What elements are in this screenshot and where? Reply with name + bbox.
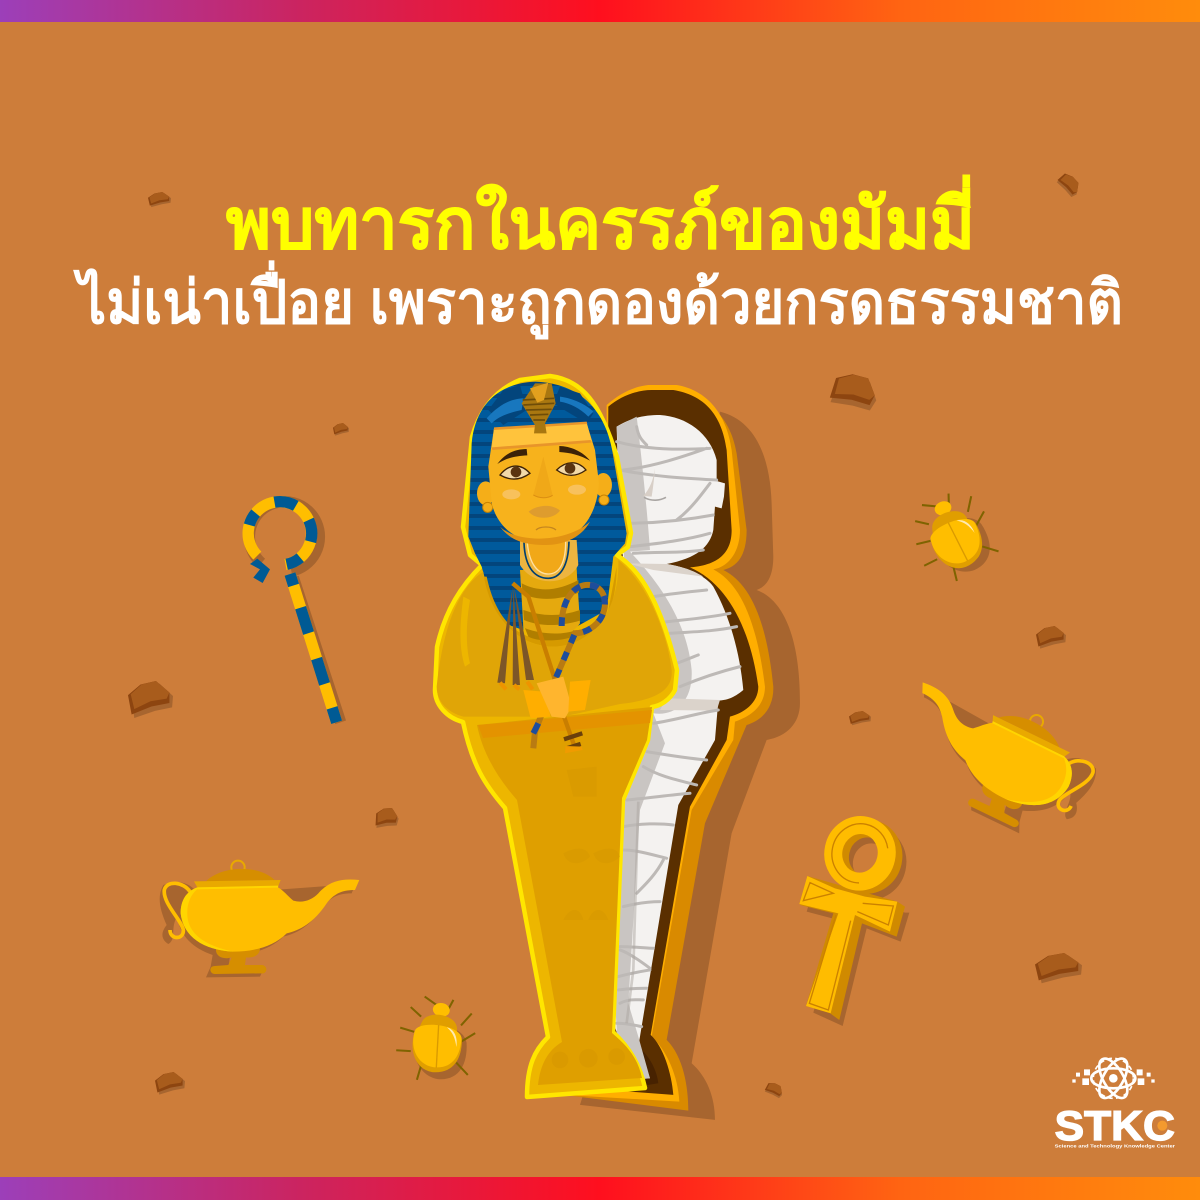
flail: [497, 587, 534, 685]
icon: scarab top right: [904, 484, 1003, 590]
ears: [477, 481, 494, 505]
crook: [533, 585, 605, 748]
logo emblem: [1072, 1054, 1155, 1102]
cobra: [522, 383, 556, 433]
face: [488, 423, 599, 542]
neck and collar: [520, 540, 578, 581]
icon: crook staff: [248, 502, 341, 722]
icon: scarab bottom left: [392, 992, 480, 1088]
icon: ankh: [799, 818, 909, 1026]
rocks: [128, 170, 1083, 1102]
back coffin with mummy: [563, 385, 800, 1120]
eyes: [500, 466, 530, 479]
title line 2: ไม่เน่าเปื่อย เพราะถูกดองด้วยกรดธรรมชาติ: [72, 260, 1123, 340]
figure: sarcophagus and mummy: [435, 376, 800, 1120]
front coffin: [435, 376, 677, 1097]
coffin lower body: [477, 707, 652, 1085]
title line 1: พบทารกในครรภ์ของมัมมี่: [226, 174, 975, 263]
logo wordmark: STKC: [1055, 1103, 1175, 1149]
hands: [523, 690, 551, 718]
logo tagline: Science and Technology Knowledge Center: [1055, 1143, 1175, 1149]
top gradient bar: [0, 0, 1200, 22]
headdress: [468, 382, 627, 630]
face and regalia: [437, 382, 672, 753]
bottom gradient bar: [0, 1177, 1200, 1200]
icon: lamp left: [160, 861, 359, 977]
icon: lamp right: [882, 665, 1109, 853]
logo: STKC: [1055, 1054, 1175, 1149]
waist band: [478, 710, 652, 738]
torso stripes: [480, 567, 617, 647]
